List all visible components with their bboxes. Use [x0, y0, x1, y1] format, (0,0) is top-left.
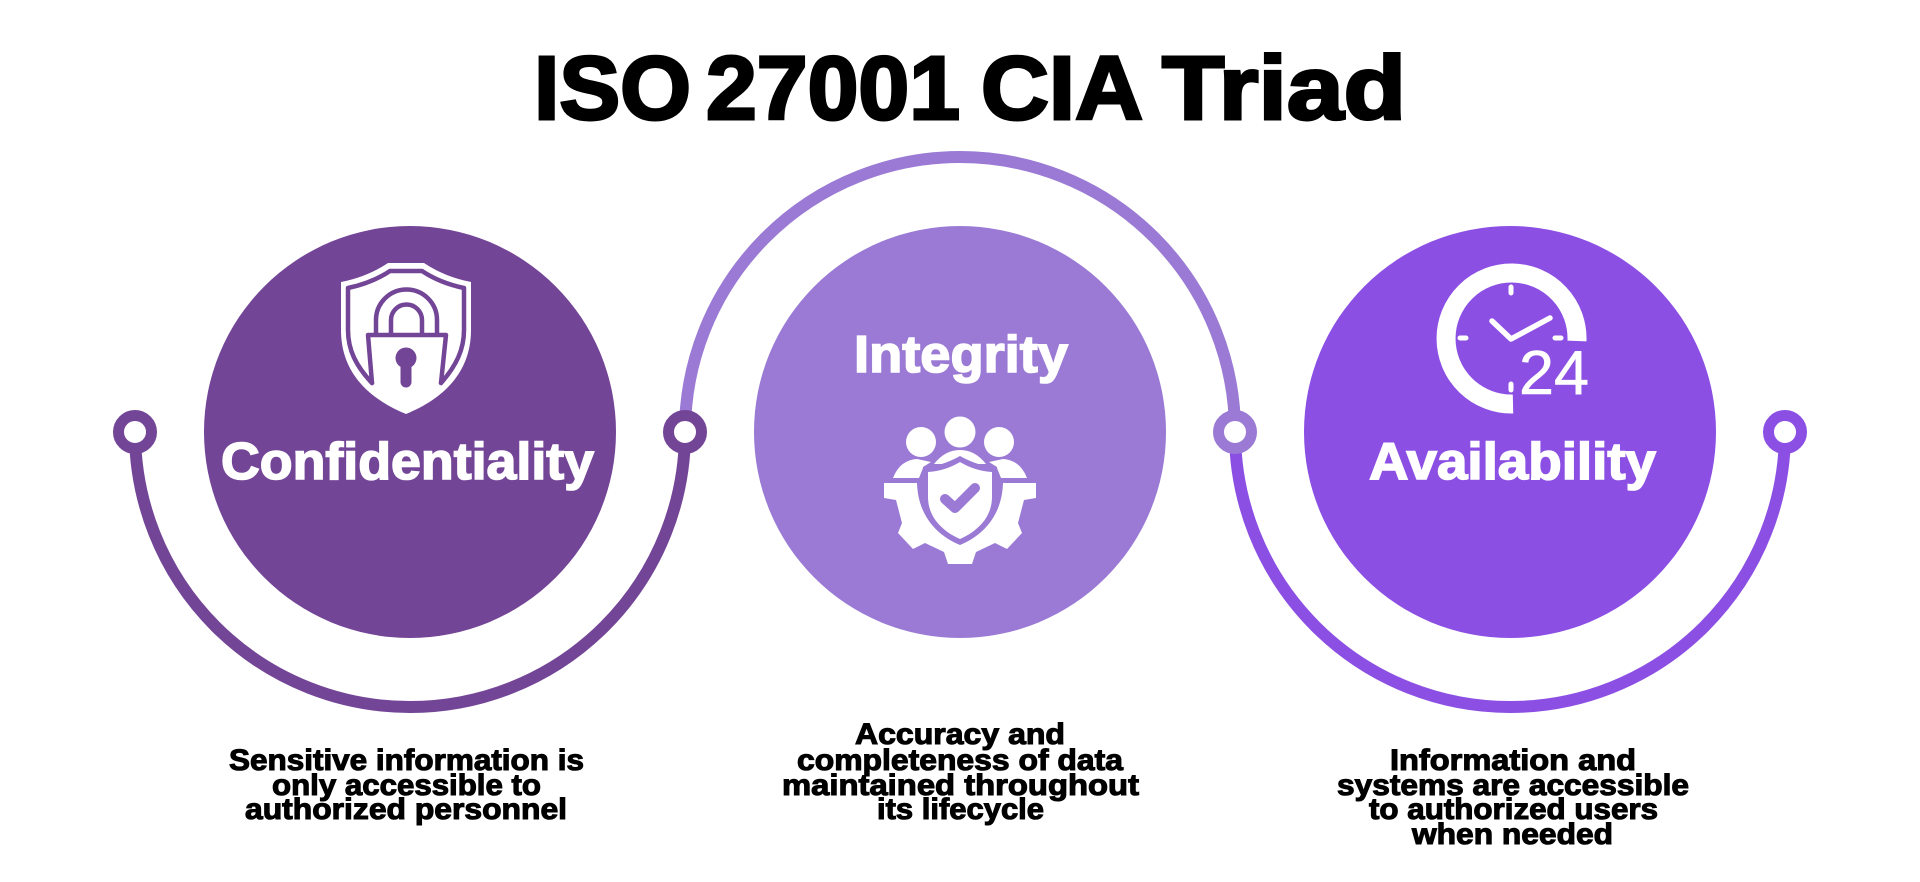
node: left confidentiality	[118, 416, 152, 448]
text block: availability description: when needed	[1411, 818, 1613, 851]
text block: integrity description: completeness of data	[797, 744, 1123, 777]
text block: confidentiality description: Sensitive information is	[229, 744, 584, 777]
text block: availability description: to authorized users	[1369, 793, 1658, 826]
panel: integrity	[754, 226, 1166, 638]
title	[534, 39, 1406, 139]
icon: 24 hour clock	[1446, 273, 1589, 408]
text block: availability description: Information and	[1390, 744, 1636, 777]
text block: confidentiality description: authorized personnel	[245, 793, 567, 826]
icon: people, gear and shield	[884, 416, 1036, 564]
title: 27001	[706, 39, 960, 139]
title: Triad	[1162, 39, 1406, 139]
text block: integrity description	[782, 718, 1139, 826]
text block: confidentiality description: only accessible to	[272, 769, 541, 802]
text block: integrity description: Accuracy and	[855, 718, 1065, 751]
title: CIA	[981, 39, 1143, 139]
arc: availability bottom	[1235, 432, 1785, 707]
heading: confidentiality: Confidentiality	[221, 433, 594, 491]
arc: confidentiality bottom	[135, 432, 685, 707]
title: ISO	[534, 39, 691, 139]
panel: availability	[1304, 226, 1716, 638]
text block: integrity description: maintained throughout	[782, 769, 1139, 802]
text block: availability description	[1337, 744, 1689, 851]
arc: integrity top	[685, 157, 1235, 432]
node: right availability	[1768, 416, 1802, 448]
node: between confidentiality and integrity	[668, 416, 702, 448]
text block: availability description: systems are accessible	[1337, 769, 1689, 802]
icon: 24 hour clock: 24	[1519, 339, 1589, 408]
heading: availability: Availability	[1369, 433, 1656, 491]
icon: shield with padlock	[341, 263, 471, 414]
node: between integrity and availability	[1218, 416, 1252, 448]
text block: confidentiality description	[229, 744, 584, 826]
text block: integrity description: its lifecycle	[877, 793, 1044, 826]
heading: integrity: Integrity	[854, 326, 1068, 384]
panel: confidentiality	[204, 226, 616, 638]
